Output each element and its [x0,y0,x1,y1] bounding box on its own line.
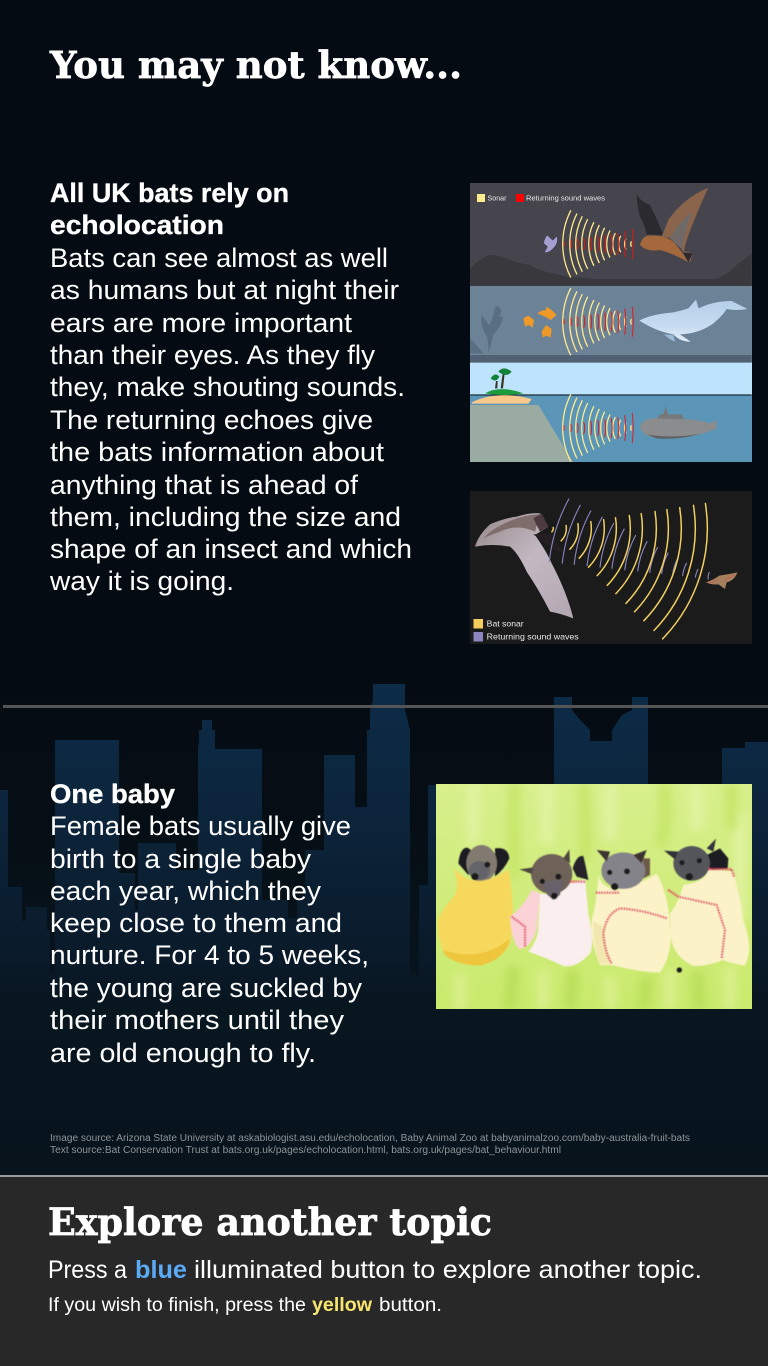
moth [706,572,737,589]
image: sonar comparison of bat, dolphin and submarine [470,183,752,462]
source credits [50,1133,690,1156]
bat 4 in cream cloth [664,839,749,966]
body text: echolocation: the bats information about [50,437,385,467]
body text: echolocation: ears are more important [50,308,353,338]
panel: one baby text [50,779,369,1068]
heading: one baby: One baby [50,779,175,809]
instruction: blue button: blue [135,1256,187,1284]
title: You may not know... [49,43,462,87]
bat 3 in cream cloth [591,850,671,973]
instruction: yellow button: yellow [312,1295,372,1316]
image: bat sonar reaching a moth [470,491,752,644]
source credits: Text source:Bat Conservation Trust at bats.org.uk/pages/echolocation.html, bats.org.uk/pages/bat_behaviour.html [50,1145,561,1156]
instruction: yellow button: button. [379,1295,442,1316]
instruction: blue button: illuminated button to explore another topic. [194,1256,702,1284]
body text: echolocation: as humans but at night their [50,275,399,305]
body text: echolocation: way it is going. [49,566,234,596]
body text: echolocation: anything that is ahead of [50,470,359,500]
panel: echolocation text [49,178,412,596]
legend: sonar and returning waves: Sonar [488,194,507,203]
city skyline silhouette [0,684,768,1100]
yellow sonar waves [552,504,707,639]
instruction: yellow button [48,1295,442,1316]
bat 2 in pink cloth [510,849,592,966]
body text: echolocation: them, including the size and [50,502,401,532]
body text: echolocation: The returning echoes give [50,405,373,435]
body text: one baby: are old enough to fly. [50,1038,316,1068]
bat 1 in yellow cloth [438,845,513,966]
body text: one baby: keep close to them and [50,908,342,938]
body text: echolocation: Bats can see almost as well [50,243,388,273]
body text: one baby: the young are suckled by [50,973,363,1003]
body text: one baby: their mothers until they [50,1005,345,1035]
bat photo [475,513,573,618]
body text: echolocation [49,243,412,596]
body text: one baby: birth to a single baby [50,844,312,874]
divider [3,705,768,708]
legend: sonar and returning waves: Returning sound waves [526,194,605,203]
panel: explore another topic [0,1175,768,1366]
dolphin scene [470,300,752,363]
body text: one baby: each year, which they [50,876,322,906]
legend: bat sonar and returning waves: Returning sound waves [487,631,579,641]
heading: all UK bats rely on echolocation [50,178,289,240]
body text: echolocation: they, make shouting sounds. [50,372,405,402]
heading: all UK bats rely on echolocation: echolocation [50,210,224,240]
legend: bat sonar and returning waves [474,618,579,642]
green blanket folds [460,783,740,1010]
heading: explore another topic: Explore another topic [48,1200,492,1244]
body text: one baby [50,811,369,1068]
eyes and noses [471,858,702,973]
instruction: blue button: Press a [48,1256,127,1284]
body text: echolocation: shape of an insect and which [50,534,412,564]
instruction: yellow button: If you wish to finish, press the [48,1295,306,1316]
body text: echolocation: than their eyes. As they fly [50,340,376,370]
purple returning waves [549,499,710,580]
legend: bat sonar and returning waves: Bat sonar [487,618,524,628]
body text: one baby: Female bats usually give [50,811,351,841]
submarine scene [470,368,752,462]
bat scene [470,188,752,286]
image: four baby bats wrapped in cloth [436,783,752,1010]
body text: one baby: nurture. For 4 to 5 weeks, [50,940,369,970]
source credits: Image source: Arizona State University at askabiologist.asu.edu/echolocation, Baby Animal Zoo at babyanimalzoo.com/baby-australia-fruit-bats [50,1133,690,1144]
legend: sonar and returning waves [477,194,605,202]
heading: all UK bats rely on echolocation: All UK bats rely on [50,178,289,208]
